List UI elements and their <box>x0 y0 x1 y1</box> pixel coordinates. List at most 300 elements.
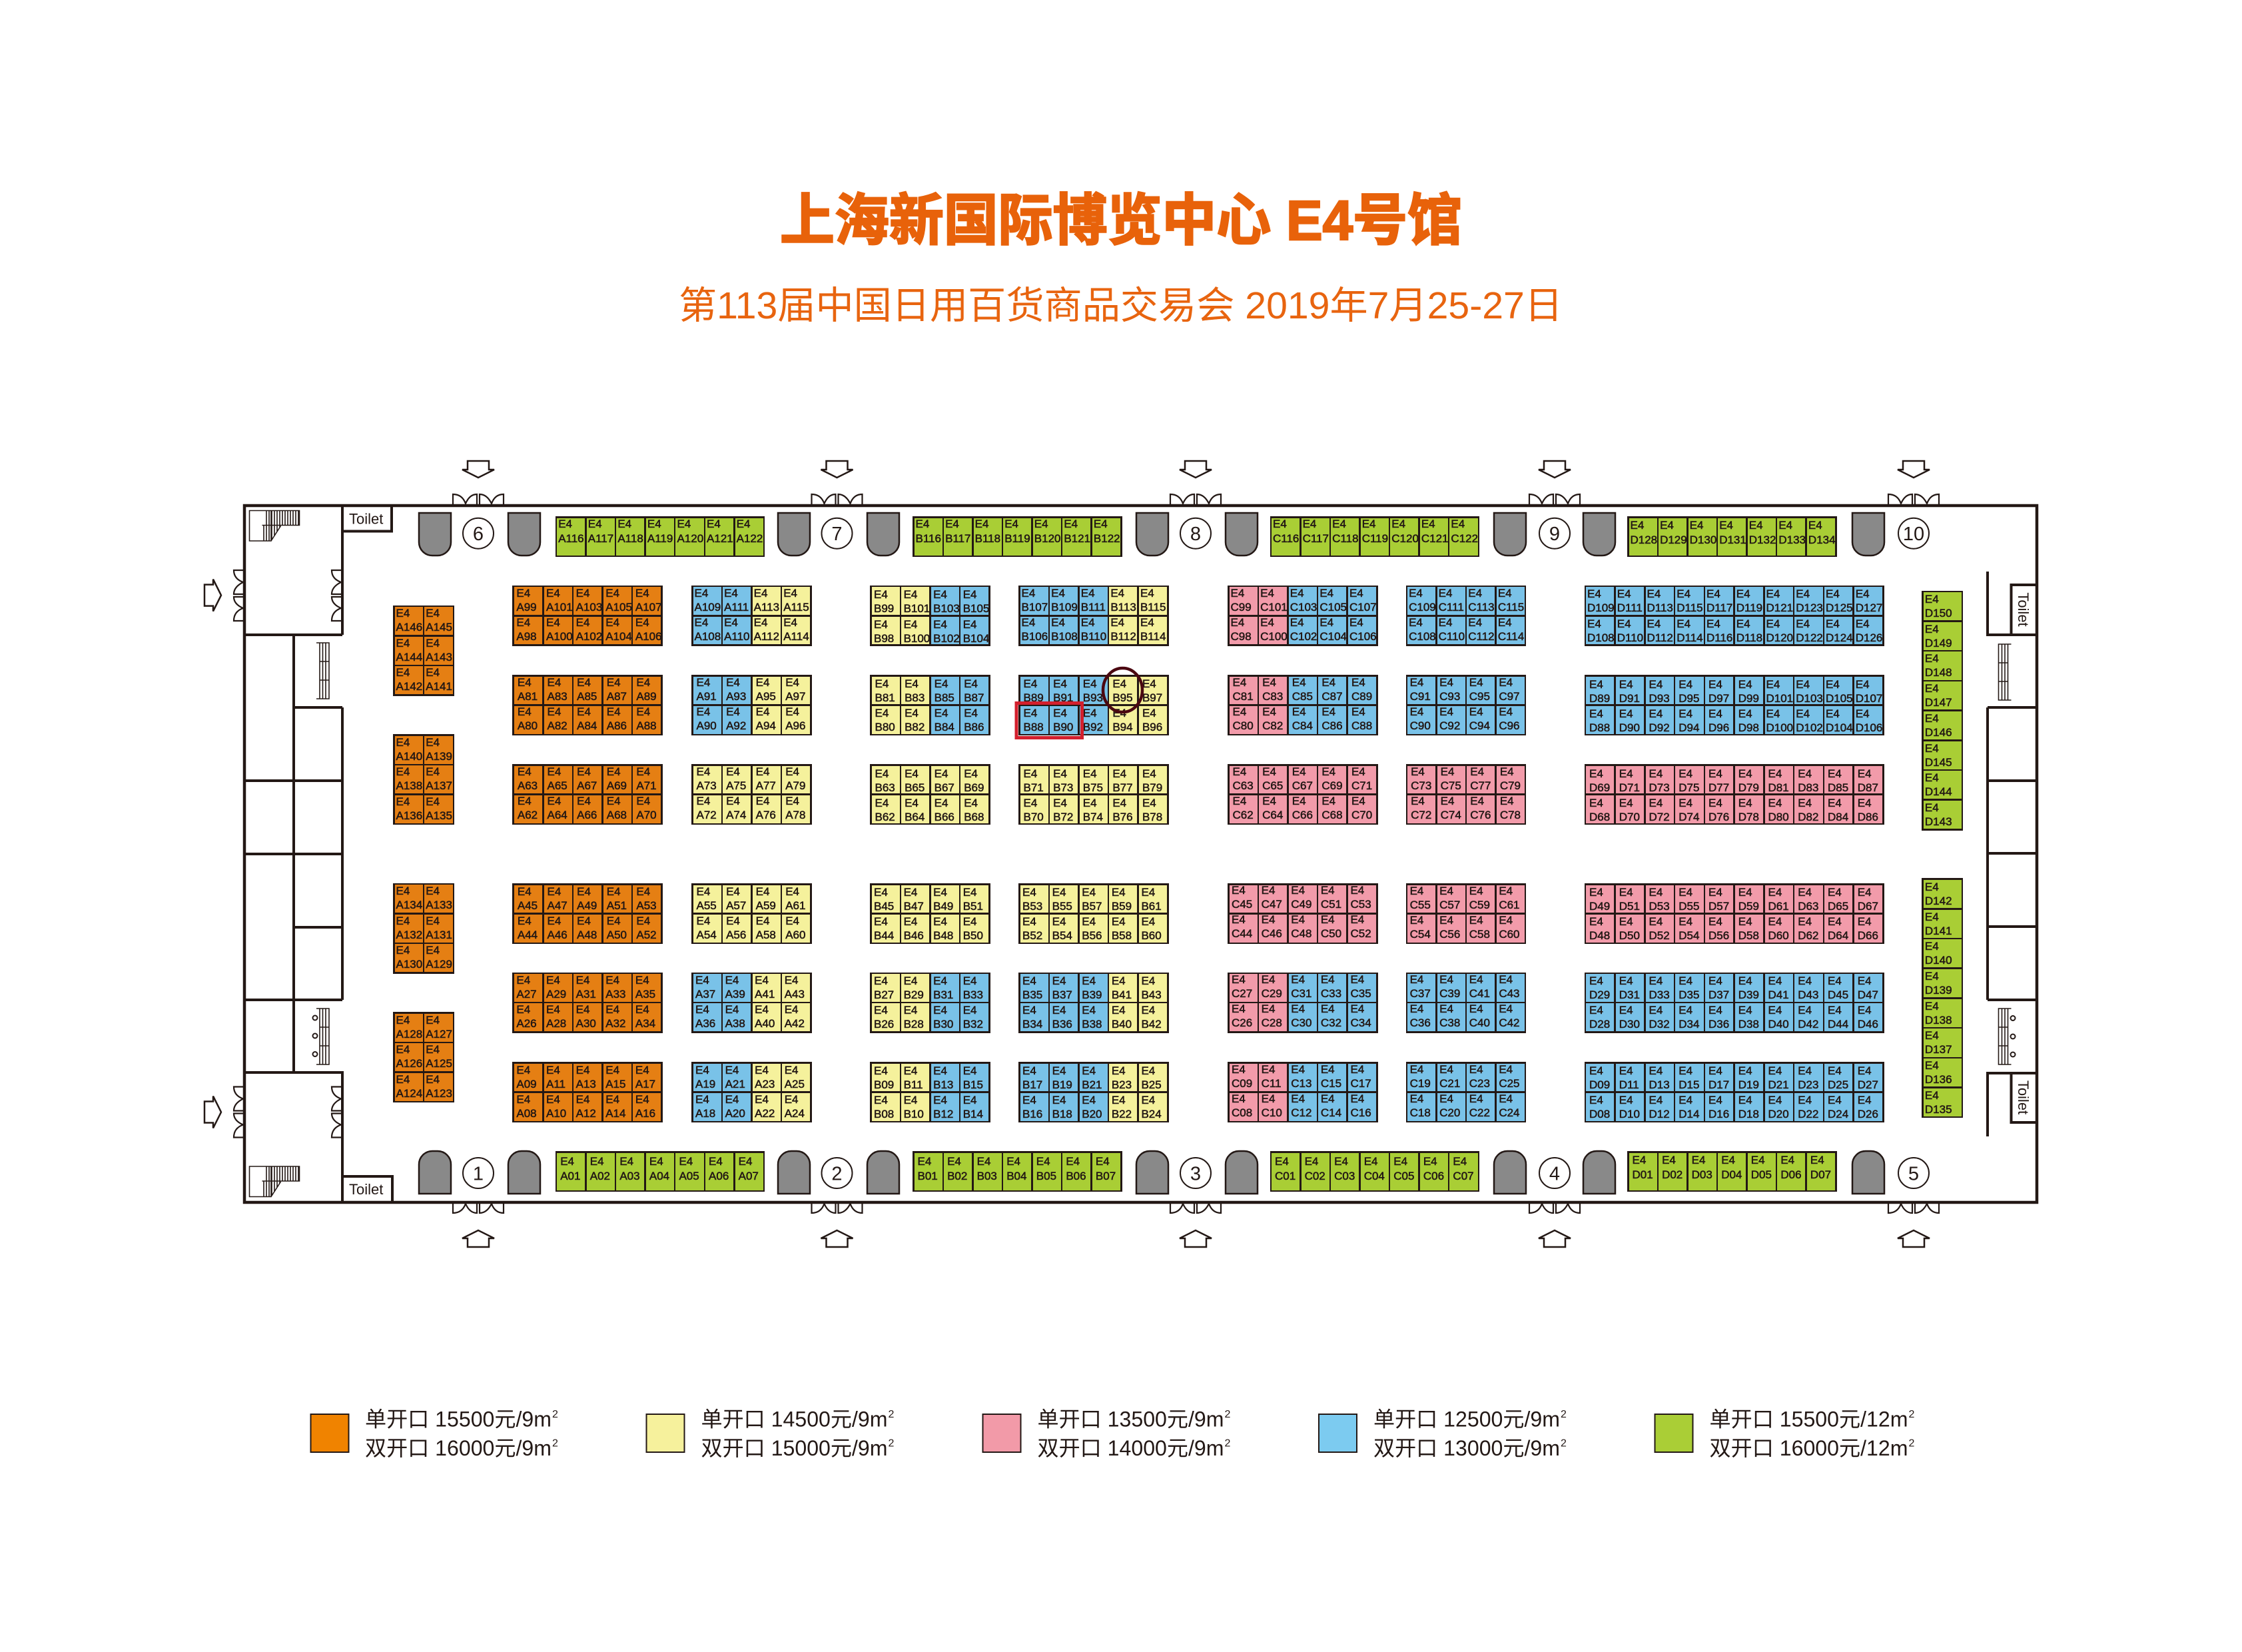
booth block: B34-B43: E4 <box>1082 975 1096 987</box>
booth strip: C116-C122: C118 <box>1332 532 1359 545</box>
booth block: D48-D67: D62 <box>1798 929 1818 942</box>
booth strip: A116-A122: E4 <box>588 517 602 530</box>
booth block: B08-B15: B12 <box>933 1108 953 1120</box>
booth block: A98-A107: A103 <box>576 601 602 614</box>
booth block: C90-C97: E4 <box>1410 676 1423 689</box>
booth block: B62-B69: B68 <box>964 811 984 823</box>
booth block: C80-C89: C87 <box>1321 690 1343 703</box>
booth block: B52-B61: E4 <box>1022 886 1036 898</box>
booth block: A26-A35: E4 <box>635 974 649 987</box>
booth block: B08-B15: E4 <box>933 1094 947 1106</box>
booth block: B98-B105: B100 <box>904 632 930 645</box>
booth strip: A116-A122: E4 <box>677 517 691 530</box>
booth block: D88-D107: E4 <box>1766 707 1780 720</box>
booth block: B34-B43: E4 <box>1112 975 1126 987</box>
booth block: D48-D67: E4 <box>1828 915 1842 928</box>
booth block: D48-D67: D57 <box>1708 899 1729 913</box>
booth block: C108-C115: E4 <box>1468 616 1482 629</box>
booth block: C108-C115: E4 <box>1498 616 1512 629</box>
booth block: D48-D67: E4 <box>1768 915 1782 928</box>
booth strip: D01-D07: D06 <box>1780 1168 1802 1180</box>
booth strip: B01-B07: E4 <box>918 1155 931 1167</box>
booth block: C08-C17: E4 <box>1291 1063 1305 1075</box>
booth block: A80-A89: E4 <box>518 705 532 718</box>
booth block: A62-A71: A64 <box>548 809 567 821</box>
booth block: D68-D87: D71 <box>1619 781 1640 794</box>
booth block: C108-C115: C108 <box>1409 630 1436 643</box>
booth block: D88-D107: E4 <box>1619 678 1633 690</box>
booth block: C80-C89: E4 <box>1321 705 1335 718</box>
booth block: D28-D47: E4 <box>1858 975 1872 987</box>
booth block: C72-C79: C77 <box>1470 779 1491 792</box>
booth block: B16-B25: B17 <box>1022 1078 1042 1091</box>
booth block: A08-A17: E4 <box>546 1063 560 1076</box>
booth block: A26-A35: A32 <box>605 1017 625 1030</box>
booth block: C98-C107: C105 <box>1319 601 1347 614</box>
booth block: A62-A71: A66 <box>577 809 597 821</box>
booth column: A135-A140: E4 <box>396 795 410 807</box>
booth block: C36-C43: C39 <box>1439 987 1460 1000</box>
booth block: B08-B15: B13 <box>933 1078 953 1091</box>
booth strip: A01-A07: A05 <box>679 1170 699 1182</box>
booth block: A44-A53: A44 <box>518 929 538 941</box>
booth strip: B01-B07 <box>913 1151 1122 1192</box>
booth block: A80-A89: A89 <box>636 690 657 703</box>
booth strip: B116-B122: E4 <box>945 517 959 530</box>
gate numbers: 3 <box>1190 1163 1201 1184</box>
booth block: A98-A107 <box>512 586 663 646</box>
booth block: C90-C97: C93 <box>1439 690 1460 703</box>
booth block: A62-A71: E4 <box>607 765 621 778</box>
booth block: D08-D27: E4 <box>1708 1094 1722 1106</box>
booth block: B44-B51: B51 <box>963 899 983 913</box>
booth block: B80-B87: B84 <box>934 721 954 733</box>
booth block: A62-A71: A67 <box>577 779 597 792</box>
booth block: C44-C53: C47 <box>1262 898 1282 910</box>
booth block: B80-B87 <box>870 675 990 735</box>
booth block: D88-D107: E4 <box>1796 678 1810 690</box>
booth strip: D128-D134: D133 <box>1778 533 1806 546</box>
booth block: B70-B79: E4 <box>1083 797 1097 809</box>
booth strip: A116-A122: E4 <box>647 517 661 530</box>
booth block: C62-C71: C63 <box>1232 779 1254 792</box>
booth block: B88-B97 <box>1018 675 1169 735</box>
booth block: C26-C35: E4 <box>1291 1003 1305 1015</box>
booth block: D68-D87: E4 <box>1679 767 1692 779</box>
booth block: B88-B97: E4 <box>1023 677 1037 690</box>
booth block: C36-C43: E4 <box>1439 973 1453 986</box>
booth block: A08-A17: A16 <box>635 1107 655 1120</box>
booth column: A135-A140: A136 <box>396 809 422 822</box>
booth block: D08-D27: D16 <box>1708 1108 1729 1120</box>
booth block: A36-A43: E4 <box>695 1003 709 1016</box>
booth block: C36-C43: E4 <box>1410 973 1423 986</box>
gate numbers: 2 <box>831 1163 843 1184</box>
booth column: D135-D142: E4 <box>1925 1059 1939 1072</box>
booth block: A98-A107: A98 <box>516 630 537 643</box>
booth block: D68-D87: D73 <box>1649 781 1670 794</box>
booth block: D68-D87: E4 <box>1768 767 1782 779</box>
booth column: D135-D142: D142 <box>1925 895 1952 907</box>
booth column: D135-D142: D138 <box>1925 1014 1952 1027</box>
booth block: C90-C97: C96 <box>1499 719 1520 732</box>
booth block: C90-C97: C92 <box>1439 719 1460 732</box>
booth block: B88-B97: E4 <box>1142 677 1156 690</box>
legend item: orange: 2 <box>552 1409 558 1420</box>
booth block: C18-C25: C23 <box>1469 1076 1490 1090</box>
booth block: D28-D47: D37 <box>1708 989 1729 1001</box>
legend item: blue: 2 <box>1561 1438 1567 1449</box>
booth block: D08-D27: D24 <box>1828 1108 1848 1120</box>
booth block: D28-D47: D38 <box>1738 1018 1759 1031</box>
booth block: A62-A71: A62 <box>518 809 538 821</box>
legend item: pink: 2 <box>1224 1438 1231 1449</box>
booth block: A72-A79: A75 <box>726 779 746 792</box>
booth block: C54-C61: E4 <box>1439 914 1453 927</box>
booth block: D08-D27: D23 <box>1798 1078 1818 1091</box>
booth block: D28-D47: E4 <box>1589 975 1603 987</box>
booth block: B34-B43: E4 <box>1141 975 1155 987</box>
booth block: C08-C17: C17 <box>1350 1076 1371 1090</box>
booth block: D28-D47: D45 <box>1828 989 1848 1001</box>
booth block: D48-D67: D52 <box>1649 929 1670 942</box>
booth block: D48-D67: D66 <box>1858 929 1878 942</box>
booth block: A72-A79: A73 <box>697 779 717 792</box>
booth block: B80-B87: E4 <box>905 677 919 690</box>
booth block: B44-B51: B46 <box>904 929 924 942</box>
booth block: B08-B15: E4 <box>963 1064 977 1076</box>
booth column: D143-D150: D149 <box>1925 637 1952 649</box>
booth block: D28-D47: D28 <box>1589 1018 1610 1031</box>
booth strip: C116-C122: C119 <box>1362 532 1388 545</box>
booth block: C98-C107: E4 <box>1319 616 1333 629</box>
booth block: C72-C79: C78 <box>1500 809 1521 821</box>
booth block: C44-C53: C46 <box>1262 927 1282 940</box>
booth block: B98-B105: E4 <box>933 588 947 601</box>
booth block: A08-A17: A10 <box>546 1107 566 1120</box>
booth block: D08-D27: D11 <box>1619 1078 1639 1091</box>
booth block: C62-C71: C67 <box>1292 779 1313 792</box>
booth block: B80-B87: E4 <box>964 677 978 690</box>
booth block: C98-C107: C104 <box>1319 630 1347 643</box>
booth block: B88-B97: E4 <box>1053 707 1067 719</box>
booth block: B16-B25: E4 <box>1022 1064 1036 1076</box>
booth block: A26-A35: E4 <box>576 974 589 987</box>
booth block: B52-B61: E4 <box>1141 886 1155 898</box>
booth block: A108-A115: E4 <box>754 616 767 629</box>
booth block: D48-D67: E4 <box>1738 886 1752 898</box>
booth block: C90-C97: E4 <box>1499 676 1513 689</box>
booth block: D88-D107: D90 <box>1619 721 1640 734</box>
booth block: B106-B115: B106 <box>1022 630 1048 643</box>
booth column: A129-A134: A129 <box>426 958 452 971</box>
booth block: B106-B115: B110 <box>1081 630 1106 643</box>
gate numbers: 9 <box>1549 524 1560 545</box>
booth block: D88-D107: D92 <box>1649 721 1670 734</box>
booth block: C26-C35: C27 <box>1232 987 1252 1000</box>
booth block: D88-D107: E4 <box>1679 678 1692 690</box>
booth block: D08-D27: D19 <box>1738 1078 1759 1091</box>
booth block: C44-C53: E4 <box>1232 913 1246 926</box>
floor plan <box>204 460 2038 1248</box>
booth column: A129-A134: E4 <box>426 885 440 897</box>
booth block: A80-A89: A87 <box>607 690 627 703</box>
booth block: D108-D127: D127 <box>1856 602 1882 614</box>
booth block: D108-D127: D118 <box>1736 631 1762 644</box>
toilet labels: Toilet <box>2015 1080 2032 1114</box>
booth strip: B116-B122: B117 <box>945 532 971 545</box>
booth block: D88-D107: E4 <box>1649 678 1663 690</box>
hall walls, doors, entrances and facilities <box>204 460 2038 1248</box>
booth block: C98-C107: C99 <box>1231 601 1252 614</box>
booth block: D108-D127: D115 <box>1677 602 1703 614</box>
booth block: C62-C71: C62 <box>1232 809 1254 821</box>
booth block: C80-C89: E4 <box>1232 676 1246 689</box>
booth block: C26-C35: C30 <box>1291 1017 1311 1029</box>
booth block: B98-B105: B103 <box>933 602 960 615</box>
booth block: D88-D107: E4 <box>1826 707 1840 720</box>
booth block: C26-C35: E4 <box>1321 1003 1335 1015</box>
booth block: A90-A97: A97 <box>785 690 805 703</box>
booth block: B106-B115: E4 <box>1140 616 1154 629</box>
booth block: C36-C43: E4 <box>1499 1003 1513 1015</box>
booth strip: B116-B122: B119 <box>1004 532 1030 545</box>
booth block: C54-C61: E4 <box>1469 914 1483 927</box>
booth block: A54-A61: E4 <box>726 885 740 898</box>
booth block: D28-D47: E4 <box>1619 975 1633 987</box>
booth block: C18-C25: C24 <box>1499 1106 1520 1119</box>
booth block: A44-A53: E4 <box>577 915 591 927</box>
legend item: blue: 2 <box>1561 1409 1567 1420</box>
booth strip: B116-B122: E4 <box>975 517 988 530</box>
booth block: C80-C89: C86 <box>1321 719 1343 732</box>
booth block: D48-D67: D51 <box>1619 899 1640 913</box>
booth block: D108-D127: E4 <box>1677 588 1690 600</box>
booth block: C08-C17: E4 <box>1321 1063 1335 1075</box>
booth strip: A116-A122: E4 <box>737 517 750 530</box>
booth block: A18-A25: A19 <box>695 1078 715 1090</box>
booth block: C108-C115: C111 <box>1439 601 1464 614</box>
booth block: D108-D127: D123 <box>1796 602 1823 614</box>
booth column: D143-D150: E4 <box>1925 742 1939 755</box>
booth block: C18-C25: E4 <box>1410 1092 1423 1105</box>
booth column: A123-A128: A124 <box>396 1087 422 1100</box>
booth block: C62-C71: E4 <box>1321 795 1335 807</box>
gate numbers: 1 <box>473 1163 484 1184</box>
booth block: B106-B115: E4 <box>1081 587 1095 600</box>
booth block: B62-B69: E4 <box>905 797 919 809</box>
booth column: A129-A134: E4 <box>396 944 410 957</box>
booth block: B16-B25: B24 <box>1141 1108 1162 1120</box>
booth column: A123-A128: E4 <box>426 1043 440 1056</box>
booth block: A108-A115: E4 <box>783 616 797 629</box>
booth block: B16-B25: E4 <box>1141 1094 1155 1106</box>
booth block: B70-B79 <box>1018 764 1169 825</box>
booth column: A129-A134: A133 <box>426 899 452 911</box>
booth block: A18-A25: E4 <box>695 1063 709 1076</box>
booth block: A26-A35: E4 <box>605 1003 619 1016</box>
booth block: A80-A89: A85 <box>577 690 597 703</box>
booth block: B62-B69: B69 <box>964 781 984 794</box>
booth block: D68-D87: E4 <box>1738 797 1752 809</box>
booth block: B98-B105: B99 <box>874 602 894 615</box>
booth block: C18-C25: E4 <box>1469 1092 1483 1105</box>
booth block: C08-C17: C12 <box>1291 1106 1311 1119</box>
booth strip: B116-B122: B122 <box>1094 532 1120 545</box>
booth block: B52-B61: B55 <box>1052 899 1072 913</box>
booth block: A44-A53: E4 <box>548 885 561 898</box>
booth block: D48-D67: D67 <box>1858 899 1878 913</box>
booth block: C72-C79: E4 <box>1441 795 1454 807</box>
booth column: A141-A146: A146 <box>396 621 422 633</box>
booth column: A141-A146: E4 <box>426 666 440 679</box>
booth strip: A01-A07: E4 <box>739 1155 752 1167</box>
booth block: B52-B61: E4 <box>1052 886 1066 898</box>
booth strip: C01-C07: C07 <box>1453 1170 1474 1182</box>
booth block: D68-D87: E4 <box>1798 767 1812 779</box>
booth block: D108-D127: E4 <box>1856 618 1870 630</box>
booth block: B106-B115: E4 <box>1051 616 1065 629</box>
booth block: B88-B97: E4 <box>1053 677 1067 690</box>
booth block: A72-A79: E4 <box>785 765 799 778</box>
booth block: C08-C17: E4 <box>1262 1063 1275 1075</box>
booth block: A26-A35: A34 <box>635 1017 655 1030</box>
booth block: D88-D107: E4 <box>1856 707 1870 720</box>
booth block: D28-D47: D39 <box>1738 989 1759 1001</box>
booth block: D88-D107: D103 <box>1796 691 1823 705</box>
booth block: B44-B51: B47 <box>904 899 924 913</box>
booth block: A108-A115: E4 <box>783 587 797 600</box>
booth block: B08-B15: E4 <box>904 1064 917 1076</box>
booth block: B34-B43: E4 <box>1022 1004 1036 1017</box>
booth block: C90-C97: E4 <box>1439 705 1453 718</box>
booth block: C26-C35: C31 <box>1291 987 1311 1000</box>
booth block: A80-A89: E4 <box>518 676 532 689</box>
booth block: B44-B51: E4 <box>904 886 917 898</box>
booth block: B34-B43: E4 <box>1022 975 1036 987</box>
booth block: D68-D87: E4 <box>1589 797 1603 809</box>
booth block: D48-D67: E4 <box>1828 886 1842 898</box>
booth block: A36-A43: A37 <box>695 988 715 1001</box>
booth strip: A116-A122: E4 <box>617 517 631 530</box>
booth block: D48-D67: E4 <box>1679 915 1692 928</box>
booth block: B44-B51: B45 <box>874 899 894 913</box>
bottom grey columns <box>419 1151 1884 1194</box>
booth block: B44-B51: E4 <box>933 886 947 898</box>
booth block: D08-D27: E4 <box>1768 1094 1782 1106</box>
booth strip: D128-D134: D129 <box>1660 533 1687 546</box>
booth strip: C116-C122: E4 <box>1391 517 1405 530</box>
booth block: C54-C61: E4 <box>1499 914 1513 927</box>
booth block: B34-B43: B34 <box>1022 1018 1042 1031</box>
booth block: A26-A35: A28 <box>546 1017 566 1030</box>
booth block: D68-D87: D72 <box>1649 811 1670 823</box>
booth block: D48-D67: E4 <box>1619 886 1633 898</box>
booth block: A98-A107: E4 <box>605 616 619 629</box>
booth block: C98-C107: C100 <box>1260 630 1288 643</box>
booth column: A123-A128: A128 <box>396 1028 422 1040</box>
booth block: A108-A115: E4 <box>724 587 738 600</box>
booth strip: B01-B07: B06 <box>1066 1170 1086 1182</box>
booth block: B80-B87: B86 <box>964 721 984 733</box>
booth block: A108-A115: A113 <box>754 601 779 614</box>
booth strip: D01-D07: D01 <box>1632 1168 1653 1180</box>
booth block: D48-D67: E4 <box>1768 886 1782 898</box>
booth column: D143-D150: D147 <box>1925 696 1952 709</box>
booth block: B52-B61: E4 <box>1082 915 1096 928</box>
booth block: A36-A43: E4 <box>785 1003 799 1016</box>
booth block: B70-B79: E4 <box>1112 797 1126 809</box>
booth block: D68-D87: D69 <box>1589 781 1610 794</box>
booth strip: A01-A07: E4 <box>590 1155 604 1167</box>
booth block: A18-A25: A21 <box>725 1078 745 1090</box>
booth block: A98-A107: E4 <box>516 587 530 600</box>
booth block: A62-A71: A69 <box>607 779 627 792</box>
booth block: D88-D107: E4 <box>1708 678 1722 690</box>
booth block: B34-B43: E4 <box>1052 1004 1066 1017</box>
booth block: A90-A97: A93 <box>726 690 746 703</box>
bottom doors and entrance arrows <box>453 1203 1939 1247</box>
booth strip: D01-D07: D02 <box>1662 1168 1682 1180</box>
booth strip: C116-C122: E4 <box>1451 517 1465 530</box>
booth block: A80-A89: A81 <box>518 690 538 703</box>
booth block: C72-C79: E4 <box>1441 765 1454 778</box>
booth block: C80-C89: C80 <box>1232 719 1254 732</box>
booth strip: D128-D134: E4 <box>1749 518 1763 532</box>
booth block: C44-C53: C51 <box>1321 898 1341 910</box>
booth block: C98-C107: E4 <box>1290 587 1304 600</box>
booth column: A135-A140: E4 <box>426 795 440 807</box>
booth block: A54-A61: A54 <box>697 929 717 941</box>
booth block: C54-C61: E4 <box>1439 885 1453 897</box>
booth block: C36-C43: E4 <box>1439 1003 1453 1015</box>
booth block: D88-D107: E4 <box>1738 678 1752 690</box>
booth block: B106-B115: B113 <box>1110 601 1136 614</box>
booth block: B16-B25: B25 <box>1141 1078 1162 1091</box>
booth column: D135-D142: E4 <box>1925 940 1939 953</box>
booth strip: D01-D07: D04 <box>1721 1168 1742 1180</box>
booth block: C36-C43 <box>1406 973 1526 1033</box>
booth strip: C01-C07: E4 <box>1453 1155 1467 1167</box>
booth block: A54-A61: E4 <box>697 885 710 898</box>
booth block: B62-B69: B66 <box>934 811 954 823</box>
booth block: B26-B33: E4 <box>963 975 977 987</box>
booth block: D108-D127: D119 <box>1736 602 1762 614</box>
booth block: C90-C97: E4 <box>1469 676 1483 689</box>
booth block: C54-C61: C57 <box>1439 898 1460 911</box>
booth block: A44-A53: E4 <box>518 885 532 898</box>
booth column: A129-A134 <box>393 883 454 974</box>
booth strip: C01-C07: E4 <box>1334 1155 1348 1167</box>
booth block: D68-D87: D76 <box>1708 811 1729 823</box>
booth block: C18-C25: E4 <box>1439 1063 1453 1075</box>
booth block: C108-C115: E4 <box>1409 616 1423 629</box>
booth block: C18-C25: E4 <box>1499 1063 1513 1075</box>
booth column: A123-A128: E4 <box>426 1073 440 1086</box>
booth block: B88-B97: B88 <box>1023 721 1044 733</box>
booth block: B34-B43: B42 <box>1141 1018 1162 1031</box>
booth block: C80-C89: E4 <box>1321 676 1335 689</box>
booth block: B52-B61 <box>1018 883 1169 944</box>
booth block: A90-A97: A94 <box>756 719 776 732</box>
booth block: B62-B69: B62 <box>875 811 895 823</box>
booth block: A80-A89: E4 <box>636 705 650 718</box>
right rooms <box>1988 572 2037 1136</box>
booth strip: C01-C07 <box>1270 1151 1479 1192</box>
booth block: C90-C97: C90 <box>1410 719 1431 732</box>
booth strip: C116-C122: C122 <box>1451 532 1478 545</box>
booth strip: D128-D134: E4 <box>1660 518 1674 532</box>
